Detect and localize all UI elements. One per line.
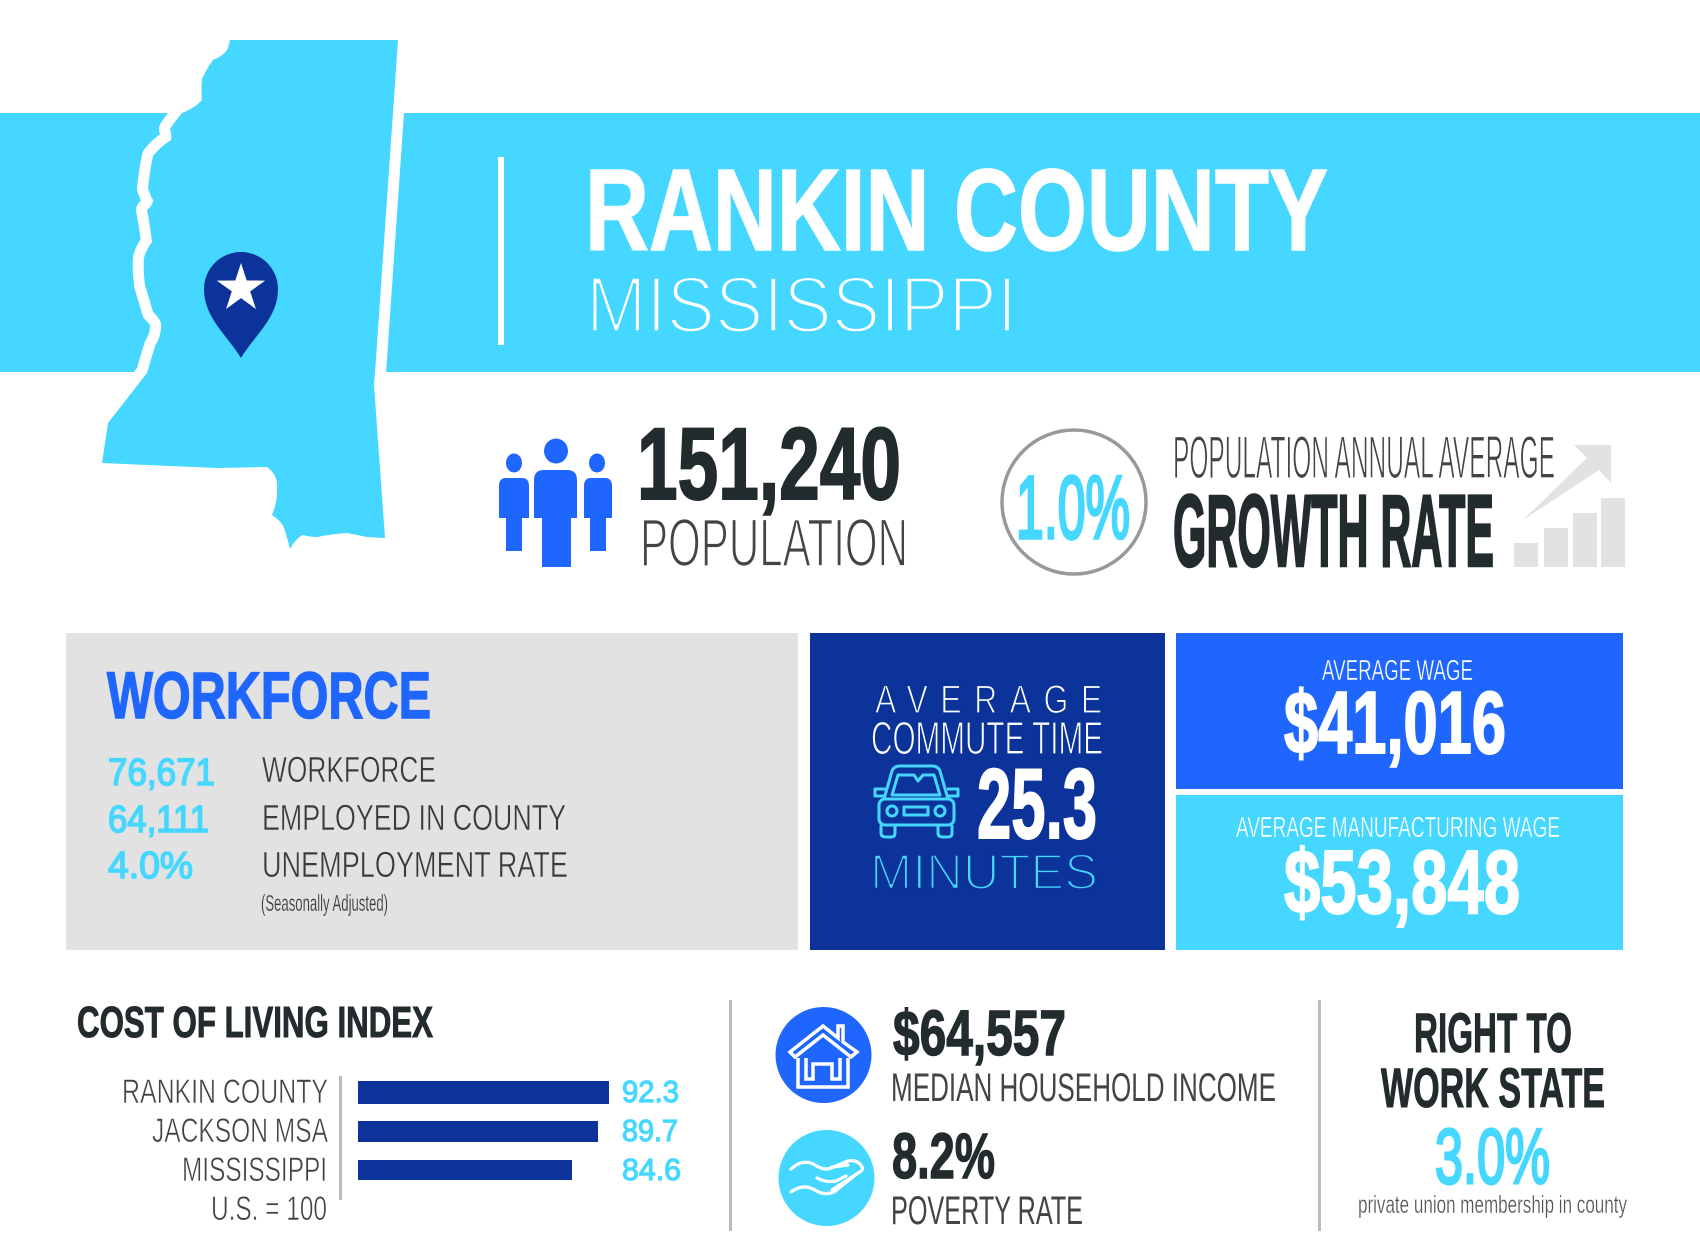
- poverty rate value: 8.2%: [892, 1120, 995, 1192]
- employed value: 64,111: [108, 799, 209, 841]
- average wage value: $41,016: [1284, 673, 1506, 772]
- bar: Jackson MSA: [358, 1121, 598, 1142]
- icon: growth chart: [1514, 445, 1625, 567]
- icon: open hand: [778, 1130, 874, 1226]
- subtitle: MISSISSIPPI: [586, 260, 1017, 349]
- value: Jackson MSA: 89.7: [622, 1113, 678, 1148]
- panel: cost of living index: [77, 998, 681, 1228]
- population label: POPULATION: [640, 505, 908, 581]
- title: RANKIN COUNTY: [585, 145, 1328, 275]
- panel: commute time: [810, 633, 1165, 950]
- map of Mississippi with location pin: [102, 40, 398, 549]
- row label: U.S. baseline: U.S. = 100: [211, 1190, 327, 1228]
- cost of living heading: COST OF LIVING INDEX: [77, 998, 433, 1047]
- population number: 151,240: [637, 407, 901, 521]
- icon: house: [776, 1007, 872, 1103]
- right to heading: RIGHT TO: [1414, 1001, 1572, 1064]
- icon: people: [499, 438, 612, 567]
- workforce label: WORKFORCE: [262, 749, 436, 790]
- growth rate value: 1.0%: [1016, 457, 1130, 557]
- location pin: [204, 252, 278, 358]
- panel: average manufacturing wage: [1176, 795, 1623, 950]
- workforce heading: WORKFORCE: [107, 658, 431, 732]
- state outline: [102, 40, 398, 549]
- title divider: [498, 157, 504, 345]
- panel: average wage: [1176, 633, 1623, 789]
- bar: Rankin County: [358, 1081, 609, 1104]
- pin star: [217, 263, 265, 309]
- average wage label: AVERAGE WAGE: [1322, 655, 1473, 687]
- value: Rankin County: 92.3: [622, 1074, 679, 1109]
- median household income label: MEDIAN HOUSEHOLD INCOME: [891, 1066, 1276, 1110]
- workforce value: 76,671: [108, 752, 215, 794]
- median household income value: $64,557: [893, 997, 1066, 1069]
- unemployment label: UNEMPLOYMENT RATE: [262, 844, 568, 885]
- commute value: 25.3: [977, 748, 1097, 859]
- manufacturing wage value: $53,848: [1284, 833, 1520, 933]
- average label: AVERAGE: [875, 677, 1102, 722]
- growth rate circle: [1002, 430, 1146, 574]
- seasonally adjusted note: (Seasonally Adjusted): [261, 890, 388, 916]
- employed label: EMPLOYED IN COUNTY: [262, 797, 566, 838]
- poverty rate label: POVERTY RATE: [891, 1189, 1083, 1233]
- minutes label: MINUTES: [870, 844, 1098, 900]
- bar: Mississippi: [358, 1160, 572, 1180]
- union membership value: 3.0%: [1435, 1112, 1550, 1200]
- panel: workforce: [66, 633, 798, 950]
- commute time label: COMMUTE TIME: [871, 712, 1103, 764]
- right to work block: [1358, 1001, 1627, 1219]
- row label: Mississippi: MISSISSIPPI: [182, 1151, 327, 1189]
- value: Mississippi: 84.6: [622, 1152, 681, 1187]
- row label: Rankin County: RANKIN COUNTY: [122, 1073, 328, 1111]
- unemployment value: 4.0%: [108, 845, 193, 887]
- icon: car: [875, 766, 958, 837]
- row label: Jackson MSA: JACKSON MSA: [152, 1112, 328, 1150]
- header band: [0, 113, 1700, 372]
